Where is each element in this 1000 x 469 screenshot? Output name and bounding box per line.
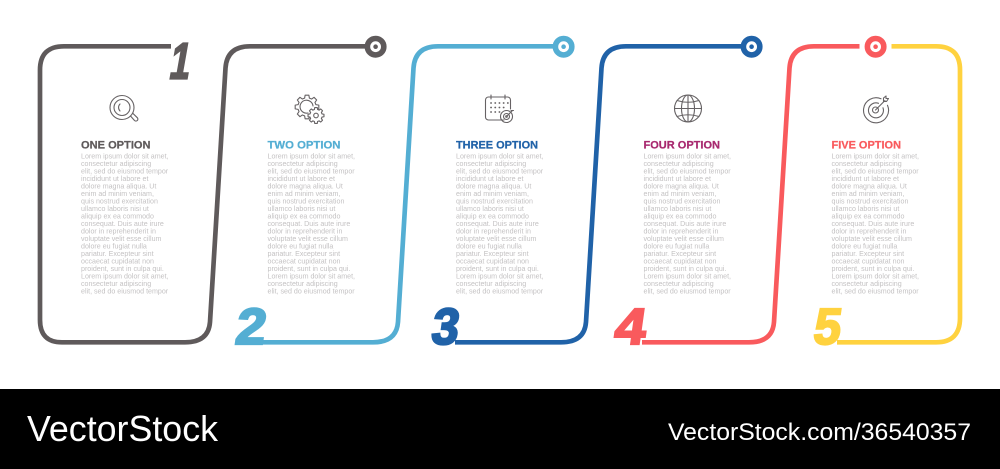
heading: three option: THREE OPTION: [456, 140, 538, 152]
text block: four option body: pariatur. Excepteur sint: [644, 250, 716, 258]
text block: three option body: ullamco laboris nisi ut: [456, 205, 524, 213]
text block: two option body: quis nostrud exercitation: [268, 198, 344, 206]
text block: four option body: proident, sunt in culpa qui.: [644, 265, 726, 273]
text block: one option body: consequat. Duis aute irure: [81, 220, 164, 228]
heading: four option: FOUR OPTION: [644, 140, 720, 152]
text block: one option body: dolor in reprehenderit in: [81, 228, 156, 236]
text block: five option body: Lorem ipsum dolor sit amet,: [832, 272, 919, 280]
text block: four option body: Lorem ipsum dolor sit amet,: [644, 152, 731, 160]
text block: five option body: dolor in reprehenderit in: [832, 228, 906, 236]
text block: four option body: dolore magna aliqua. Ut: [644, 182, 719, 190]
text block: two option body: voluptate velit esse cillum: [268, 235, 348, 243]
text block: three option body: Lorem ipsum dolor sit amet,: [456, 152, 544, 160]
panel: card two outline: [262, 38, 572, 342]
panel: card five outline: [837, 46, 960, 342]
text block: one option body: occaecat cupidatat non: [81, 258, 154, 266]
text block: four option body: ullamco laboris nisi ut: [644, 205, 711, 213]
text block: five option body: enim ad minim veniam,: [832, 190, 904, 198]
heading: two option: TWO OPTION: [268, 140, 341, 152]
text block: two option body: consectetur adipiscing: [268, 280, 338, 288]
text block: four option body: consectetur adipiscing: [644, 280, 714, 288]
text block: five option body: pariatur. Excepteur sint: [832, 250, 904, 258]
text block: one option body: incididunt ut labore et: [81, 175, 148, 183]
text block: four option body: consequat. Duis aute irure: [644, 220, 726, 228]
text block: four option body: quis nostrud exercitation: [644, 198, 720, 206]
text block: five option body: elit, sed do eiusmod tempor: [832, 168, 919, 176]
text block: five option body: dolore magna aliqua. Ut: [832, 182, 907, 190]
icon: gears: [295, 95, 324, 123]
text block: one option body: consectetur adipiscing: [81, 160, 151, 168]
text block: three option body: proident, sunt in culpa qui.: [456, 265, 539, 273]
number 3: 3: [428, 298, 463, 355]
text block: four option body: dolore eu fugiat nulla: [644, 242, 709, 250]
text block: four option body: incididunt ut labore et: [644, 175, 711, 183]
text block: two option body: proident, sunt in culpa qui.: [268, 265, 350, 273]
text block: two option body: ullamco laboris nisi ut: [268, 205, 335, 213]
footer brand name: VectorStock: [27, 408, 219, 449]
text block: four option body: consectetur adipiscing: [644, 160, 714, 168]
panel: card four outline: [642, 38, 884, 342]
heading: one option: ONE OPTION: [81, 140, 151, 152]
text block: four option body: occaecat cupidatat non: [644, 258, 717, 266]
text block: three option body: Lorem ipsum dolor sit amet,: [456, 272, 544, 280]
text block: three option body: consectetur adipiscing: [456, 280, 526, 288]
text block: three option body: dolore magna aliqua. Ut: [456, 182, 531, 190]
text block: three option body: voluptate velit esse cillum: [456, 235, 537, 243]
text block: three option body: dolore eu fugiat nulla: [456, 242, 522, 250]
text block: four option body: elit, sed do eiusmod tempor: [644, 168, 731, 176]
text block: five option body: voluptate velit esse cillum: [832, 235, 912, 243]
text block: three option body: dolor in reprehenderit in: [456, 228, 531, 236]
text block: two option body: occaecat cupidatat non: [268, 258, 341, 266]
text block: five option body: consectetur adipiscing: [832, 280, 902, 288]
text block: one option body: quis nostrud exercitation: [81, 198, 158, 206]
icon: globe: [674, 95, 702, 122]
text block: five option body: quis nostrud exercitation: [832, 198, 908, 206]
text block: one option body: dolore eu fugiat nulla: [81, 242, 147, 250]
text block: five option body: occaecat cupidatat non: [832, 258, 905, 266]
text block: two option body: pariatur. Excepteur sint: [268, 250, 340, 258]
text block: three option body: occaecat cupidatat non: [456, 258, 529, 266]
text block: two option body: consectetur adipiscing: [268, 160, 338, 168]
text block: five option body: dolore eu fugiat nulla: [832, 242, 897, 250]
text block: four option body: dolor in reprehenderit in: [644, 228, 718, 236]
text block: five option body: aliquip ex ea commodo: [832, 212, 905, 220]
text block: two option body: dolore eu fugiat nulla: [268, 242, 333, 250]
heading: five option: FIVE OPTION: [832, 140, 901, 152]
text block: five option body: Lorem ipsum dolor sit amet,: [832, 152, 919, 160]
text block: four option body: voluptate velit esse cillum: [644, 235, 724, 243]
text block: three option body: quis nostrud exercitation: [456, 198, 533, 206]
text block: two option body: elit, sed do eiusmod tempor: [268, 288, 355, 296]
text block: three option body: incididunt ut labore et: [456, 175, 523, 183]
icon: magnifier: [110, 96, 138, 121]
text block: one option body: consectetur adipiscing: [81, 280, 151, 288]
text block: one option body: elit, sed do eiusmod tempor: [81, 168, 169, 176]
text block: one option body: pariatur. Excepteur sint: [81, 250, 154, 258]
text block: three option body: consequat. Duis aute irure: [456, 220, 539, 228]
text block: one option body: Lorem ipsum dolor sit amet,: [81, 152, 169, 160]
text block: five option body: consequat. Duis aute irure: [832, 220, 914, 228]
text block: five option body: incididunt ut labore et: [832, 175, 899, 183]
text block: one option body: ullamco laboris nisi ut: [81, 205, 149, 213]
text block: one option body: proident, sunt in culpa qui.: [81, 265, 164, 273]
text block: four option body: elit, sed do eiusmod tempor: [644, 288, 731, 296]
text block: five option body: consectetur adipiscing: [832, 160, 902, 168]
text block: two option body: incididunt ut labore et: [268, 175, 335, 183]
text block: two option body: consequat. Duis aute irure: [268, 220, 350, 228]
text block: two option body: aliquip ex ea commodo: [268, 212, 341, 220]
text block: three option body: consectetur adipiscing: [456, 160, 526, 168]
icon: calendar with target: [486, 95, 514, 122]
text block: five option body: proident, sunt in culpa qui.: [832, 265, 914, 273]
number 5: 5: [810, 298, 845, 355]
number 4: 4: [611, 298, 651, 355]
text block: one option body: aliquip ex ea commodo: [81, 212, 154, 220]
text block: three option body: elit, sed do eiusmod tempor: [456, 168, 544, 176]
footer bar: [0, 389, 1000, 469]
text block: four option body: Lorem ipsum dolor sit amet,: [644, 272, 731, 280]
text block: five option body: elit, sed do eiusmod tempor: [832, 288, 919, 296]
number 2: 2: [232, 298, 270, 355]
text block: one option body: elit, sed do eiusmod tempor: [81, 288, 169, 296]
text block: four option body: aliquip ex ea commodo: [644, 212, 717, 220]
text block: one option body: dolore magna aliqua. Ut: [81, 182, 156, 190]
text block: three option body: enim ad minim veniam,: [456, 190, 529, 198]
number 1: 1: [166, 32, 196, 89]
text block: one option body: voluptate velit esse cillum: [81, 235, 162, 243]
text block: four option body: enim ad minim veniam,: [644, 190, 716, 198]
text block: one option body: Lorem ipsum dolor sit amet,: [81, 272, 169, 280]
footer image reference: VectorStock.com/36540357: [668, 419, 971, 446]
panel: card one outline: [40, 38, 384, 342]
text block: two option body: enim ad minim veniam,: [268, 190, 340, 198]
text block: three option body: pariatur. Excepteur sint: [456, 250, 529, 258]
text block: one option body: enim ad minim veniam,: [81, 190, 154, 198]
text block: five option body: ullamco laboris nisi ut: [832, 205, 899, 213]
text block: two option body: dolor in reprehenderit in: [268, 228, 342, 236]
text block: two option body: dolore magna aliqua. Ut: [268, 182, 343, 190]
text block: three option body: elit, sed do eiusmod tempor: [456, 288, 544, 296]
text block: two option body: elit, sed do eiusmod tempor: [268, 168, 355, 176]
icon: target with arrow: [864, 96, 889, 123]
panel: card three outline: [455, 38, 760, 342]
text block: two option body: Lorem ipsum dolor sit amet,: [268, 152, 355, 160]
text block: three option body: aliquip ex ea commodo: [456, 212, 529, 220]
text block: two option body: Lorem ipsum dolor sit amet,: [268, 272, 355, 280]
